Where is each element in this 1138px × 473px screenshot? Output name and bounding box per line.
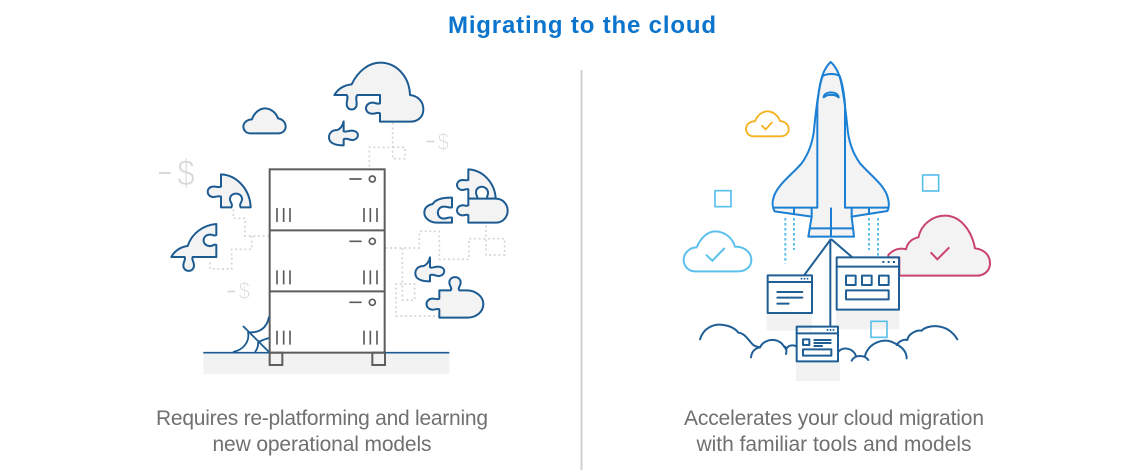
caption: left [156, 407, 488, 456]
window: text lines [768, 275, 812, 313]
shuttle [773, 62, 889, 237]
dollar sign: large [159, 151, 195, 193]
ground line [203, 350, 449, 355]
puzzle piece right big rounded [426, 277, 483, 318]
smoke clouds [700, 325, 957, 361]
ground shadow [203, 353, 449, 374]
dollar sign: upper right: $ [438, 129, 449, 156]
panel: rocket illustration [684, 62, 990, 381]
caption: right: Accelerates your cloud migration [684, 407, 984, 430]
fish puzzle piece top [329, 121, 358, 145]
dashed connectors [210, 123, 505, 316]
dollar sign: upper right [427, 129, 449, 156]
exhaust dashes [785, 218, 878, 263]
yellow cloud [746, 111, 789, 136]
caption: right [684, 407, 984, 456]
window: form [797, 327, 838, 361]
window: tiles [837, 257, 899, 310]
puzzle piece right bottom rounded [457, 199, 508, 223]
connectors from shuttle to windows [804, 239, 852, 326]
small cloud [243, 108, 286, 133]
shadows under windows [767, 310, 899, 381]
dollar sign: lower: $ [239, 278, 250, 305]
caption: left: new operational models [212, 433, 432, 456]
puzzle piece right top [457, 169, 496, 199]
panel: legacy server illustration [159, 63, 508, 374]
dollar sign: large: $ [177, 151, 195, 193]
puzzle piece right c-shape [424, 198, 452, 223]
server rack [270, 169, 385, 365]
caption: left: Requires re-platforming and learning [156, 407, 488, 430]
blue cloud [684, 231, 751, 271]
squares [715, 175, 939, 337]
puzzle piece left upper [208, 174, 251, 207]
title: Migrating to the cloud [448, 12, 716, 39]
fish puzzle piece lower [415, 257, 444, 281]
puzzle piece left lower [171, 224, 216, 271]
spider web [233, 317, 269, 352]
caption: right: with familiar tools and models [696, 433, 972, 456]
dollar sign: lower [227, 278, 250, 305]
center divider [580, 70, 582, 470]
red cloud [888, 216, 990, 276]
big puzzle cloud [334, 63, 423, 122]
